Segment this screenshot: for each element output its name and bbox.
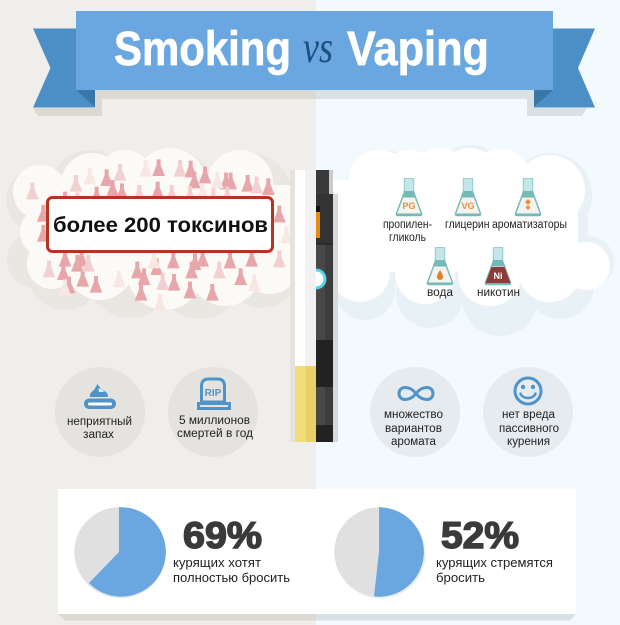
stat: 52%: курящих стремятся [436,556,553,570]
vape dark band [316,340,333,387]
flask: nicotine: Ni [494,271,502,281]
label [384,409,443,448]
flask: flavour [515,178,541,216]
icon: infinity [399,388,433,400]
flask: nicotine [485,248,511,285]
cigarette filter [295,366,306,442]
label: нет вреда [502,409,556,421]
panel: deaths [168,367,258,457]
title: vs [303,23,333,72]
vape orange window [316,206,320,238]
vape body [316,244,333,245]
stat: 69% [173,515,290,585]
label: курения [507,436,550,448]
stat: 69%: полностью бросить [173,571,290,585]
vape upper section [316,194,333,244]
label [177,415,253,440]
panel shadow [58,614,576,620]
cigarette paper [295,170,305,366]
label: запах [83,429,114,441]
banner shadow [33,90,587,116]
label: множество [384,409,443,421]
flask: water [427,248,453,285]
panel body [58,489,576,614]
cigarette shadow [290,170,295,442]
panel: statistics [58,489,576,620]
flask labels: пропилен- [383,219,432,231]
stat: 69%: курящих хотят [173,556,261,570]
flask labels: вода [427,287,454,299]
panel: no passive smoking harm [483,367,573,457]
pie chart: 52% [334,507,426,598]
flask labels: глицерин [445,219,490,231]
vape top [316,170,329,194]
left cloud shadow [6,149,298,319]
flask labels: никотин [477,287,520,299]
flask: PG [396,178,422,216]
flask: PG: PG [402,201,416,211]
title [114,23,489,76]
flask labels: ароматизаторы [492,219,567,231]
background: right side [316,0,620,625]
stat: 52%: бросить [436,571,485,585]
icon: gravestone: RIP [205,388,222,399]
banner [33,11,595,116]
icon: poop [84,384,116,409]
panel: flavours [370,367,460,457]
flask labels: гликоль [389,232,426,244]
label: неприятный [67,416,132,428]
toxin flasks [26,159,293,311]
title: Vaping [347,23,489,76]
label: 5 миллионов [179,415,250,427]
stat: 52%: 52% [441,515,519,556]
callout: toxins: более 200 токсинов [53,214,268,237]
vape indicator light [316,270,325,288]
label: вариантов [385,423,442,435]
stat: 52% [436,515,553,585]
panel: unpleasant smell [55,367,145,457]
vape lower band [316,387,325,425]
icon: smiley [515,378,541,404]
vape device [316,170,338,442]
vape tip [316,425,333,442]
flask: VG [455,178,481,216]
banner folds [76,90,553,107]
pie chart: 69% [74,507,166,598]
right cloud [330,145,614,336]
right cloud shadow [335,145,614,336]
left cloud body [13,148,300,310]
label: аромата [391,436,437,448]
vape shadow [333,194,338,442]
right cloud body [330,148,610,306]
label [499,409,559,448]
label [67,416,132,441]
banner body [76,11,553,90]
label: смертей в год [177,428,253,440]
flask labels [383,219,567,299]
callout: toxins [48,198,272,252]
background: left side [0,0,316,625]
left cloud [6,148,300,319]
flask: VG: VG [461,201,475,211]
banner right tail [534,28,595,108]
stat: 69%: 69% [183,515,262,556]
banner left tail [33,28,95,108]
title: Smoking [114,23,291,76]
cigarette [290,170,316,442]
label: пассивного [499,423,559,435]
